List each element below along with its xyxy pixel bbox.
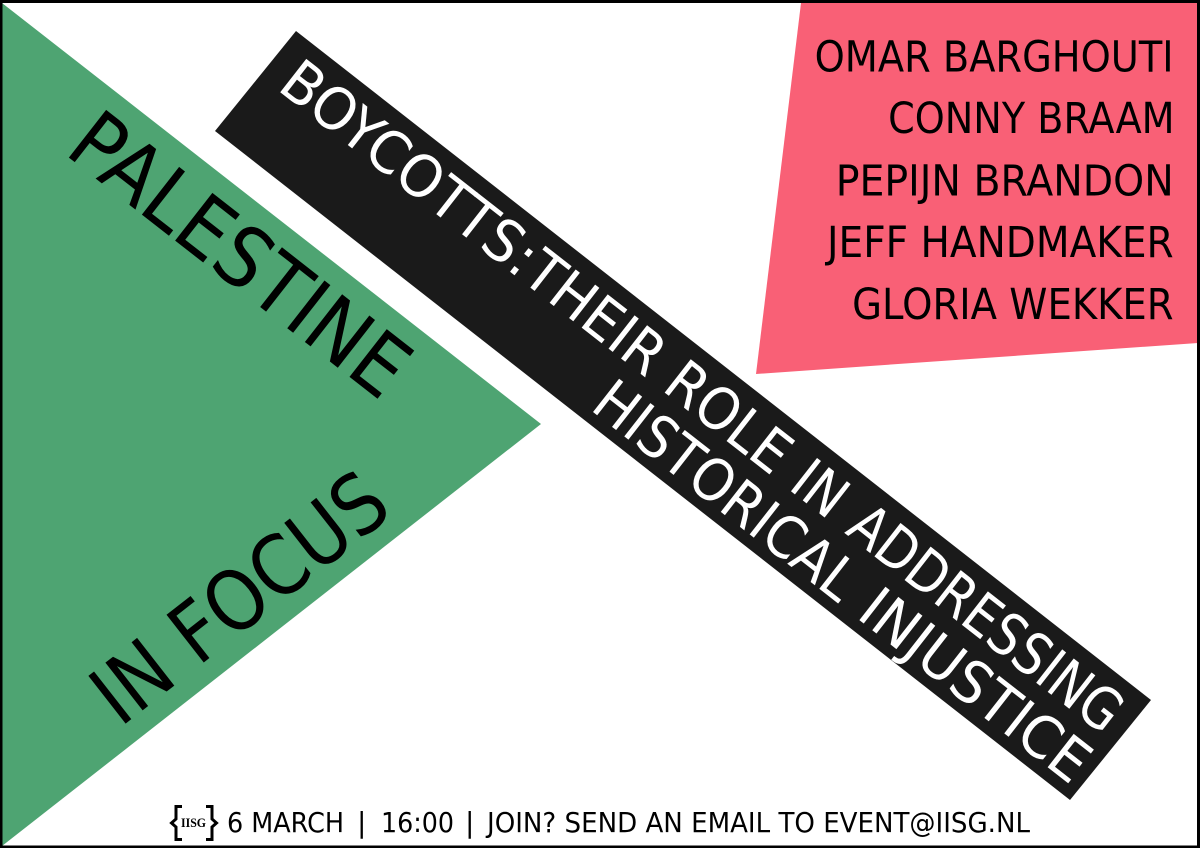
band title line 2 [580, 366, 1104, 796]
footer event details: 6 MARCH [227, 806, 344, 839]
band title line 1: IN [779, 446, 862, 532]
band title line 1 [267, 46, 1137, 746]
speaker 2: CONNY BRAAM [888, 95, 1175, 144]
band title line 1: THEIR [510, 236, 680, 389]
footer event details [227, 806, 1030, 839]
speakers list [815, 34, 1175, 330]
icon: IISG logo [172, 806, 216, 840]
footer event details: | [465, 806, 474, 839]
pink speakers panel [756, 3, 1198, 374]
band title line 2: INJUSTICE [846, 574, 1104, 796]
band title line 1: BOYCOTTS: [267, 46, 553, 290]
speaker 4: JEFF HANDMAKER [824, 219, 1174, 268]
green triangle panel [2, 3, 541, 846]
speaker 3: PEPIJN BRANDON [836, 158, 1174, 207]
heading: In Focus: IN FOCUS [73, 452, 407, 744]
heading: Palestine: PALESTINE [51, 92, 429, 417]
band title line 2: HISTORICAL [580, 366, 872, 615]
band title line 1: ADDRESSING [835, 490, 1137, 746]
footer event details: 16:00 [381, 806, 454, 839]
black title band [215, 31, 1151, 800]
footer event details: JOIN? SEND AN EMAIL TO EVENT@IISG.NL [485, 806, 1030, 839]
band title line 1: ROLE [652, 347, 805, 488]
speaker 5: GLORIA WEKKER [852, 281, 1174, 330]
icon: IISG logo: IISG [181, 815, 206, 830]
footer event details: | [357, 806, 366, 839]
